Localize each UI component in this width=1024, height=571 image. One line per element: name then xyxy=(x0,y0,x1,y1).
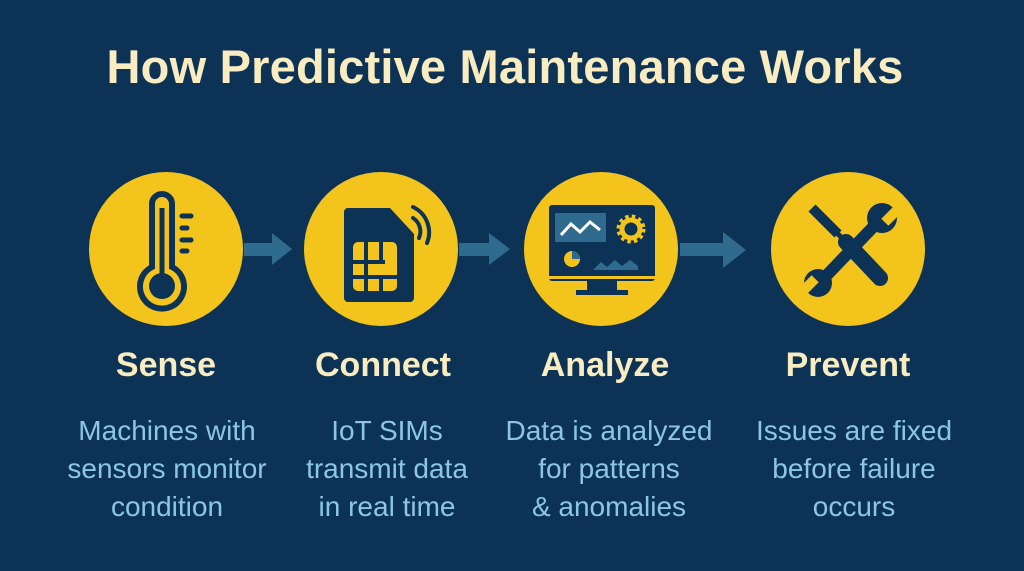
step 4 text: before failure xyxy=(772,453,936,484)
step 2 text xyxy=(306,415,468,522)
step 3 text: & anomalies xyxy=(532,491,686,522)
step 1 text: condition xyxy=(111,491,223,522)
icon: sim card xyxy=(304,172,458,326)
step 1 label: Sense xyxy=(116,346,216,384)
step 4 label: Prevent xyxy=(786,346,910,384)
step 1 text xyxy=(67,415,267,522)
step 1 text: Machines with xyxy=(78,415,256,446)
step 2 text: in real time xyxy=(319,491,455,522)
step 3 text xyxy=(505,415,712,522)
step 4 text: Issues are fixed xyxy=(756,415,952,446)
step 2 label: Connect xyxy=(315,346,451,384)
icon: thermometer xyxy=(89,172,243,326)
step 4 text xyxy=(756,415,952,522)
step 1 text: sensors monitor xyxy=(67,453,267,484)
arrow 2 xyxy=(459,233,510,265)
arrow 3 xyxy=(680,232,746,268)
step 3 text: for patterns xyxy=(538,453,680,484)
title: How Predictive Maintenance Works xyxy=(107,40,903,93)
icon: monitor dashboard xyxy=(524,172,678,326)
step 2 text: transmit data xyxy=(306,453,468,484)
icon: tools xyxy=(771,172,925,326)
step 4 text: occurs xyxy=(813,491,895,522)
step 3 text: Data is analyzed xyxy=(505,415,712,446)
arrow 1 xyxy=(244,233,292,265)
step 2 text: IoT SIMs xyxy=(331,415,443,446)
step 3 label: Analyze xyxy=(541,346,669,384)
